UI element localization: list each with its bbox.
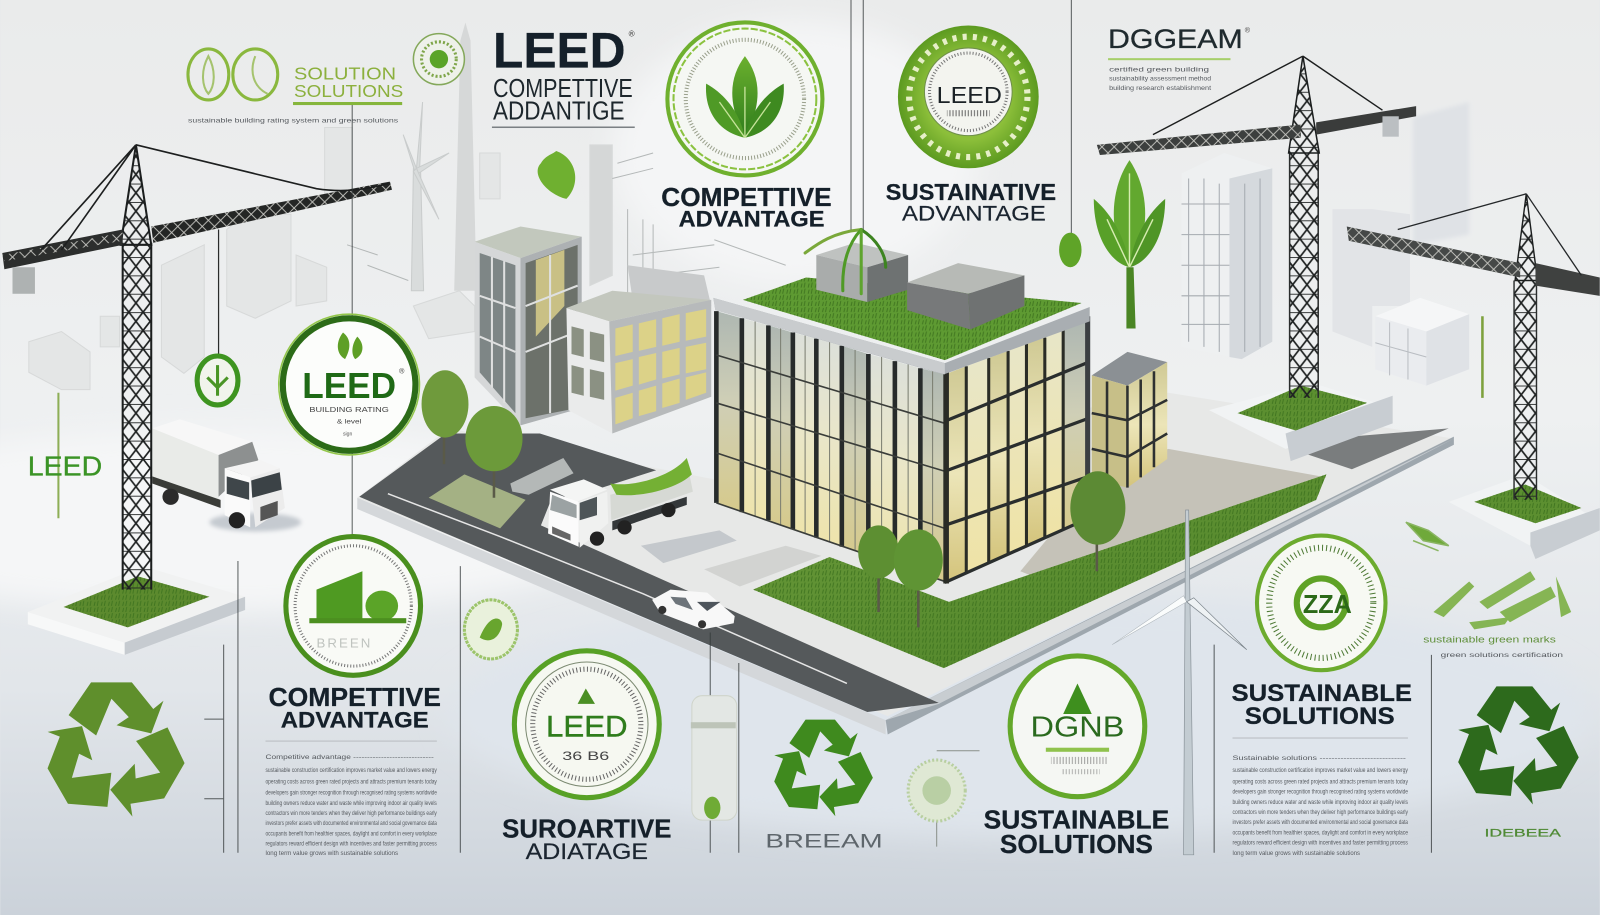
heading: LEED competitive advantage: LEED [493, 22, 626, 78]
LEED green label: LEED [28, 450, 102, 481]
counter jib [2, 230, 123, 269]
badge: LEED left [279, 314, 420, 455]
crane left [2, 145, 392, 590]
thin vertical guide lines [204, 0, 1431, 853]
badge: DGNB [1010, 656, 1145, 797]
green scattered fragments [1406, 522, 1571, 659]
heading: suroartive adiatage: SUROARTIVE [502, 815, 671, 843]
heading: competitive advantage top: COMPETTIVE [661, 184, 832, 212]
road [359, 434, 939, 712]
building: mid office [566, 265, 711, 434]
roof block right [907, 263, 1024, 329]
badge: ZZA: ZZA [1303, 591, 1352, 619]
sketched rebar lines [347, 153, 786, 306]
recycle symbol center [763, 720, 881, 823]
DGGEAM label: certified green building [1109, 66, 1210, 73]
badge: LEED left: LEED [302, 366, 396, 406]
paragraph left: sustainable construction certification improves market value and lowers energy [265, 767, 437, 774]
paragraph left: occupants benefit from healthier spaces, daylight and comfort in every workplace [265, 830, 437, 837]
paragraph right: sustainable construction certification improves market value and lowers energy [1233, 767, 1408, 774]
badge: green building bottom left [286, 537, 421, 675]
recycle symbol olive [32, 682, 196, 826]
solution label: sustainable building rating system and green solutions [188, 117, 399, 124]
faded instrument tube [691, 696, 737, 820]
left glass facade [716, 311, 945, 581]
BREEAM label: BREEAM [765, 831, 883, 853]
LEED green label [28, 393, 102, 518]
heading: sustainative advantage [886, 179, 1056, 225]
paragraph left: regulators reward efficient design with incentives and faster permitting process [265, 841, 437, 848]
badge: LEED wreath: LEED [937, 82, 1002, 108]
paragraph left: contractors win more tenders when they deliver high performance buildings early [265, 810, 437, 817]
building: back tower [475, 226, 582, 425]
heading: LEED competitive advantage [492, 22, 635, 128]
building shadow hatch [641, 530, 737, 563]
paragraph left: long term value grows with sustainable solutions [265, 850, 399, 857]
site platform [357, 393, 1454, 734]
heading: competitive advantage top [661, 184, 832, 231]
solution label [188, 64, 403, 124]
small pendant top [1059, 233, 1082, 267]
heading: competitive advantage bottom left: COMPETTIVE [269, 684, 441, 712]
heading: sustainable solutions center: SUSTAINABLE [984, 806, 1169, 834]
badge: LEED left: BUILDING RATING [309, 406, 389, 414]
leaf marks [203, 56, 268, 94]
chimney tower [454, 22, 477, 291]
badge: LEED bottom center [514, 651, 659, 798]
badge: LEED bottom center: 36 B6 [562, 749, 610, 763]
heading: sustainable solutions right: SOLUTIONS [1245, 703, 1395, 730]
crane base far right [1449, 474, 1600, 559]
trees [422, 370, 1125, 627]
crane base middle right [1209, 383, 1393, 461]
heading: sustainable solutions right: SUSTAINABLE [1231, 680, 1412, 707]
tower top [121, 145, 151, 245]
badge: LEED bottom center: LEED [546, 710, 628, 743]
paragraph left: operating costs across green rated projects and attracts premium tenants today [265, 778, 437, 785]
paragraph right: occupants benefit from healthier spaces, daylight and comfort in every workplace [1233, 829, 1408, 836]
mast [123, 243, 151, 590]
cables [41, 145, 388, 250]
white tower [1182, 153, 1272, 359]
paragraph left [265, 754, 437, 857]
leaf emblem [706, 56, 784, 138]
paragraph right [1233, 755, 1408, 857]
wind turbine left [403, 102, 449, 291]
faded city skyline right [1182, 102, 1469, 386]
rooftop plant [805, 230, 886, 294]
green scattered fragments: green solutions certification [1441, 652, 1563, 659]
DGGEAM label: sustainability assessment method [1109, 76, 1211, 83]
building: right annex [1092, 352, 1167, 488]
road right [1306, 428, 1449, 469]
heading: competitive advantage bottom left [265, 684, 441, 742]
badge: leaf top center [667, 22, 822, 175]
heading: sustainable solutions center: SOLUTIONS [1000, 831, 1153, 859]
large leaf plant [1094, 160, 1165, 328]
small green leaf [538, 151, 575, 199]
DGGEAM label [1108, 24, 1251, 92]
heading: LEED competitive advantage: COMPETTIVE [493, 75, 633, 103]
DGGEAM label: building research establishment [1109, 85, 1211, 92]
badge: LEED wreath [898, 26, 1039, 168]
paragraph left: building owners reduce water and waste while improving indoor air quality levels [265, 800, 437, 807]
roof block left [816, 243, 908, 302]
solution label: SOLUTION [294, 64, 396, 84]
pendant left [197, 356, 238, 405]
heading: LEED competitive advantage: ADDANTIGE [493, 97, 625, 125]
white car [652, 590, 735, 629]
paragraph right: regulators reward efficient design with incentives and faster permitting process [1233, 840, 1408, 847]
heading: LEED competitive advantage: ® [629, 30, 635, 39]
pale buildings [29, 128, 612, 390]
green scattered fragments: sustainable green marks [1423, 635, 1556, 645]
badge: LEED left: ® [399, 367, 405, 375]
paragraph right: long term value grows with sustainable solutions [1233, 850, 1361, 857]
heading: sustainable solutions center [984, 806, 1169, 859]
truck shadow [209, 513, 301, 531]
paragraph right: investors prefer assets with documented environmental and social governance data [1233, 819, 1408, 826]
solution label: SOLUTIONS [294, 81, 403, 101]
small seal bottom [464, 600, 517, 659]
DGGEAM label: ® [1245, 27, 1251, 35]
pavement crossing [704, 546, 821, 587]
green roof [743, 277, 1082, 360]
low white block [1375, 298, 1469, 386]
heading: sustainative advantage: SUSTAINATIVE [886, 179, 1056, 205]
heading: competitive advantage bottom left: ADVANTAGE [281, 707, 429, 732]
badge: green building bottom left: BREEN [316, 636, 372, 651]
badge: ZZA [1257, 536, 1386, 670]
heading: sustainable solutions right [1231, 680, 1412, 739]
crane middle right [1097, 56, 1416, 398]
heading: suroartive adiatage [502, 815, 671, 864]
recycle symbol right [1444, 686, 1589, 813]
badge: LEED left: & level [337, 418, 361, 425]
paragraph left: Competitive advantage ----------------------------- [265, 754, 434, 761]
heading: suroartive adiatage: ADIATAGE [526, 839, 648, 864]
top left twin leaf icons [188, 49, 278, 100]
right glass facade [945, 316, 1089, 583]
paragraph left: investors prefer assets with documented environmental and social governance data [265, 820, 437, 827]
paragraph left: developers gain stronger recognition through recognised rating systems worldwide [265, 790, 437, 797]
badge: LEED left: sign [343, 432, 353, 438]
main green building [713, 230, 1090, 583]
white box truck [152, 419, 301, 531]
lawn [429, 474, 1326, 668]
badge: DGNB: DGNB [1031, 711, 1124, 743]
paragraph right: building owners reduce water and waste while improving indoor air quality levels [1233, 799, 1408, 806]
DGGEAM label: DGGEAM [1108, 24, 1243, 54]
crane far right [1347, 194, 1600, 500]
heading: sustainative advantage: ADVANTAGE [902, 201, 1046, 225]
roof parapet [713, 298, 1090, 374]
faded city skyline left [29, 22, 786, 390]
jib [151, 182, 392, 243]
paragraph right: operating costs across green rated projects and attracts premium tenants today [1233, 778, 1408, 785]
paragraph right: developers gain stronger recognition through recognised rating systems worldwide [1233, 789, 1408, 796]
paragraph right: contractors win more tenders when they deliver high performance buildings early [1233, 809, 1408, 816]
small seal top [413, 34, 464, 85]
counterweight [13, 267, 35, 294]
heading: competitive advantage top: ADVANTAGE [679, 206, 825, 231]
parked grey car [510, 458, 574, 495]
IDEBEEA label: IDEBEEA [1484, 827, 1562, 839]
dirt area [1020, 449, 1326, 592]
crane base left [28, 566, 245, 655]
cement mixer truck [548, 458, 693, 548]
paragraph right: Sustainable solutions ----------------------------- [1233, 755, 1406, 762]
wind turbine front [1112, 510, 1247, 855]
faded seal bottom [908, 751, 980, 847]
